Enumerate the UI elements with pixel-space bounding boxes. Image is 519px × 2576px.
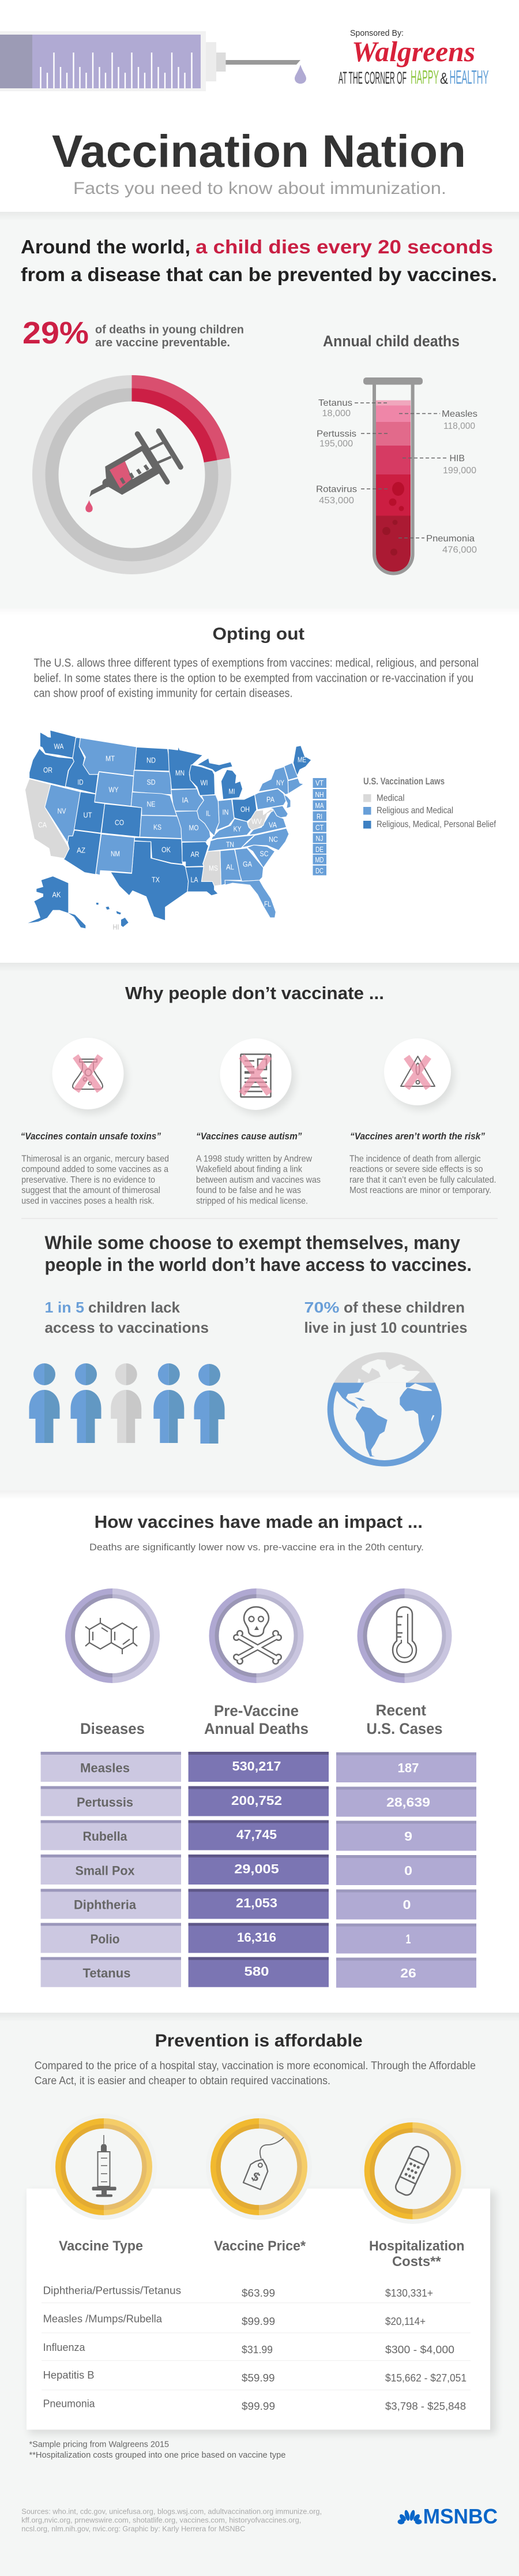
US map: TX — [152, 875, 160, 884]
table: price rows: $99.99 — [242, 2316, 275, 2327]
reason: not worth the risk: “Vaccines aren’t worth the risk” — [350, 1131, 485, 1142]
row: polio: Polio — [90, 1932, 120, 1946]
header syringe illustration — [0, 31, 306, 91]
map legend: Religious, Medical, Personal Belief — [377, 820, 496, 829]
reason: autism — [196, 1131, 321, 1206]
headline: child deaths — [21, 236, 497, 285]
stat: 1 in 5 — [45, 1299, 209, 1336]
row: pertussis: 200,752 — [231, 1793, 282, 1808]
test tube chart: 118,000 — [443, 421, 475, 431]
icon: study document — [220, 1038, 295, 1115]
US map: VA — [269, 820, 277, 829]
table headers: impact: Pre-Vaccine — [214, 1702, 299, 1719]
US map: CO — [115, 818, 124, 827]
reason: not worth the risk — [349, 1131, 496, 1195]
US map: MI — [228, 787, 235, 795]
headline: child deaths: Around the world, — [21, 236, 190, 257]
row: diphtheria — [41, 1889, 476, 1920]
icon: toxins flask — [52, 1038, 127, 1114]
heading: prevention is affordable: Prevention is affordable — [155, 2031, 363, 2051]
text block: prevention: Care Act, it is easier and cheaper to obtain required vaccinations. — [35, 2075, 330, 2087]
row: diphtheria: Diphtheria — [74, 1898, 137, 1912]
small state boxes: MA — [315, 801, 324, 810]
small state boxes: DE — [315, 845, 324, 854]
stat: 29 percent — [22, 316, 244, 350]
table: price rows: Diphtheria/Pertussis/Tetanus — [43, 2285, 181, 2296]
US map: PA — [266, 795, 274, 803]
US map: GA — [243, 859, 252, 868]
test tube chart: Pneumonia — [426, 534, 475, 544]
table headers: prices: Vaccine Price* — [214, 2238, 306, 2254]
small state boxes — [313, 778, 326, 875]
table headers: impact: Annual Deaths — [204, 1720, 309, 1737]
US map — [25, 730, 311, 931]
small state boxes: MD — [315, 855, 324, 864]
icon: five children — [29, 1363, 225, 1444]
US map: MO — [189, 823, 198, 832]
US map: ME — [298, 755, 306, 764]
row: measles — [41, 1752, 476, 1782]
table: price rows: Influenza — [43, 2342, 85, 2353]
reason: not worth the risk: The incidence of death from allergic — [349, 1154, 481, 1164]
reason: autism: stripped of his medical license. — [196, 1197, 308, 1206]
donut chart: 29 percent — [32, 375, 231, 574]
test tube chart: Measles — [442, 409, 477, 419]
test tube chart: Rotavirus — [316, 485, 357, 494]
row: tetanus — [41, 1957, 476, 1988]
heading: vaccine impact: How vaccines have made an impact ... — [95, 1512, 423, 1532]
US map: OH — [240, 805, 250, 813]
headline: child deaths: from a disease that can be prevented by vaccines. — [21, 264, 497, 285]
stat: 29 percent: 29% — [22, 316, 89, 350]
test tube chart: 453,000 — [319, 496, 354, 506]
US map: AR — [190, 850, 200, 858]
row: pertussis — [41, 1786, 476, 1817]
subheading: deaths lower: Deaths are significantly lower now vs. pre-vaccine era in the 20th century. — [89, 1542, 424, 1553]
US map: TN — [226, 840, 234, 848]
stat: 70 percent: of these children — [344, 1299, 465, 1316]
card: price table background — [27, 2189, 496, 2434]
sponsor logo: Sponsored By: — [350, 28, 404, 38]
US map: IA — [182, 795, 189, 804]
sources: ncsl.org, nlm.nih.gov, nvic.org: Graphic by: Karly Herrera for MSNBC — [21, 2524, 245, 2533]
reason: not worth the risk: reactions or severe side effects is so — [349, 1165, 483, 1174]
table headers: prices: Hospitalization — [369, 2238, 464, 2254]
row: measles: Measles — [80, 1761, 130, 1775]
row: small pox: 0 — [404, 1863, 412, 1878]
reason: unsafe toxins: suggest that the amount of thimerosal — [21, 1186, 160, 1195]
sponsor logo: AT THE CORNER OF — [339, 69, 407, 88]
stat: 70 percent: 70% — [304, 1299, 339, 1316]
US map: WV — [251, 817, 262, 825]
stat: 1 in 5: 1 in 5 — [45, 1299, 84, 1316]
table: price rows — [42, 2285, 471, 2412]
footnotes — [29, 2440, 285, 2460]
heading: access to vaccines: people in the world don’t have access to vaccines. — [45, 1254, 472, 1275]
icon ring: thermometer — [357, 1588, 452, 1683]
row: pertussis: 28,639 — [386, 1795, 430, 1809]
map legend: U.S. Vaccination Laws — [363, 776, 445, 787]
stat: 70 percent — [304, 1299, 467, 1336]
icon ring: molecule — [65, 1588, 160, 1683]
US map: MS — [209, 863, 218, 872]
row: pertussis: Pertussis — [77, 1795, 133, 1809]
table headers: impact: Diseases — [80, 1720, 145, 1737]
icon: warning triangle — [384, 1038, 454, 1110]
stat: 1 in 5: access to vaccinations — [45, 1319, 209, 1336]
table: price rows: $300 - $4,000 — [385, 2344, 454, 2356]
row: small pox: 29,005 — [234, 1862, 279, 1876]
test tube chart: 199,000 — [443, 466, 476, 476]
icon ring: price tag: $ — [249, 2169, 262, 2185]
table headers: prices: Costs** — [392, 2254, 441, 2270]
reason: autism: “Vaccines cause autism” — [196, 1131, 302, 1142]
table headers: impact — [80, 1702, 443, 1737]
small state boxes: NJ — [316, 834, 323, 843]
test tube chart — [316, 377, 477, 574]
reason: unsafe toxins: Thimerosal is an organic, mercury based — [21, 1154, 169, 1164]
stat: 29 percent: are vaccine preventable. — [95, 337, 230, 349]
US map: WY — [108, 785, 119, 794]
map legend: Religious and Medical — [377, 806, 453, 816]
US map: OK — [161, 845, 171, 854]
US map: WI — [201, 778, 208, 787]
logo: MSNBC: MSNBC — [423, 2504, 498, 2528]
US map: MN — [175, 768, 185, 777]
US map: NV — [58, 806, 66, 815]
heading: opting out: Opting out — [212, 625, 304, 644]
US map: AL — [226, 862, 234, 871]
row: diphtheria: 0 — [403, 1898, 411, 1912]
reason: unsafe toxins — [21, 1131, 169, 1206]
icon: syringe with drop — [85, 431, 180, 513]
small state boxes: VT — [315, 779, 324, 787]
table: price rows: $3,798 - $25,848 — [385, 2401, 466, 2412]
US map: FL — [264, 899, 271, 908]
test tube chart: 476,000 — [442, 545, 477, 555]
small state boxes: DC — [315, 866, 324, 875]
US map: SD — [146, 777, 156, 786]
test tube chart: Tetanus — [318, 398, 352, 408]
footnotes: *Sample pricing from Walgreens 2015 — [29, 2440, 169, 2450]
text block: exemptions: belief. In some states there is the option to be exempted from vaccination or re-vaccination if you — [33, 672, 473, 685]
table: price rows: $31.99 — [242, 2344, 273, 2356]
icon ring: price tag — [206, 2114, 312, 2220]
heading: why people don't vaccinate: Why people don’t vaccinate ... — [125, 983, 384, 1003]
row: rubella: 9 — [404, 1829, 412, 1844]
small state boxes: RI — [317, 812, 322, 821]
table: price rows: $130,331+ — [385, 2287, 433, 2299]
stat: 70 percent: live in just 10 countries — [304, 1319, 467, 1336]
sources: Sources: who.int, cdc.gov, unicefusa.org, blogs.wsj.com, adultvaccination.org immunize.org, — [21, 2507, 322, 2515]
table: price rows: $15,662 - $27,051 — [385, 2372, 467, 2384]
sponsor logo: Walgreens — [352, 35, 475, 68]
icon: globe — [328, 1352, 442, 1467]
test tube chart: 195,000 — [319, 439, 353, 449]
US map: MT — [106, 754, 115, 762]
sponsor logo: & — [440, 69, 448, 87]
text block: prevention — [35, 2060, 476, 2087]
US map: KY — [234, 824, 242, 833]
table: impact rows — [41, 1752, 476, 1988]
US map: UT — [83, 810, 92, 819]
row: polio: 16,316 — [237, 1930, 276, 1945]
sources: kff.org,nvic.org, prnewswire.com, shotatlife.org, vaccines.com, historyofvaccines.org, — [21, 2516, 301, 2525]
US map: CA — [38, 820, 47, 829]
icon ring: vaccine syringe — [51, 2114, 157, 2220]
table headers: prices — [59, 2238, 464, 2270]
heading: access to vaccines: While some choose to exempt themselves, many — [45, 1232, 460, 1253]
title: Vaccination Nation — [52, 125, 466, 177]
row: tetanus: 580 — [245, 1964, 269, 1979]
row: tetanus: 26 — [400, 1966, 416, 1980]
row: rubella: 47,745 — [236, 1827, 277, 1842]
icon ring: bandage — [360, 2118, 466, 2224]
US map: SC — [260, 849, 269, 858]
row: tetanus: Tetanus — [83, 1966, 130, 1980]
subtitle: Facts you need to know about immunization. — [73, 179, 446, 198]
reason: autism: between autism and vaccines was — [196, 1175, 321, 1185]
test tube chart: Pertussis — [317, 429, 356, 439]
US map: LA — [190, 875, 198, 884]
test tube chart: 18,000 — [322, 409, 351, 418]
reason: not worth the risk: rare that it can’t even be fully calculated. — [349, 1175, 496, 1185]
US map: OR — [43, 765, 52, 774]
sources — [21, 2507, 322, 2533]
row: rubella: Rubella — [83, 1829, 127, 1844]
US map: WA — [54, 742, 64, 750]
table: price rows: $63.99 — [242, 2287, 275, 2299]
footnotes: **Hospitalization costs grouped into one price based on vaccine type — [29, 2451, 285, 2460]
table: price rows: Hepatitis B — [43, 2369, 95, 2381]
US map: NY — [276, 778, 284, 787]
text block: exemptions — [33, 657, 479, 700]
headline: child deaths: a child dies every 20 seconds — [195, 236, 493, 257]
US map: ID — [77, 777, 83, 786]
table headers: impact: U.S. Cases — [367, 1720, 443, 1737]
US map: NM — [111, 849, 120, 858]
reason: unsafe toxins: compound added to some vaccines as a — [21, 1165, 168, 1174]
table: price rows: $99.99 — [242, 2401, 275, 2412]
US map: IL — [206, 809, 210, 817]
reason: autism: found to be false and he was — [196, 1186, 301, 1195]
US map: HI — [113, 922, 119, 931]
row: polio: 1 — [406, 1932, 411, 1946]
heading: annual child deaths: Annual child deaths — [323, 332, 460, 350]
heading: access to vaccines — [45, 1232, 472, 1275]
icon ring: skull and crossbones — [209, 1588, 303, 1683]
test tube chart: HIB — [450, 454, 465, 463]
table headers: prices: Vaccine Type — [59, 2238, 143, 2254]
row: measles: 187 — [398, 1761, 419, 1775]
reason: unsafe toxins: “Vaccines contain unsafe toxins” — [21, 1131, 161, 1142]
row: small pox: Small Pox — [75, 1863, 135, 1878]
sponsor logo: HAPPY — [411, 66, 439, 88]
US map: ND — [146, 756, 156, 764]
small state boxes: CT — [315, 823, 324, 832]
table: price rows: $59.99 — [242, 2372, 274, 2384]
table: price rows: Pneumonia — [43, 2398, 96, 2410]
table: price rows: $20,114+ — [385, 2316, 426, 2327]
US map: NE — [146, 799, 156, 808]
reason: unsafe toxins: used in vaccines poses a health risk. — [21, 1197, 154, 1206]
table headers: impact: Recent — [376, 1702, 426, 1719]
US map: NC — [269, 835, 278, 843]
row: rubella — [41, 1820, 476, 1850]
small state boxes: NH — [315, 790, 324, 799]
table: price rows: Measles /Mumps/Rubella — [43, 2313, 163, 2325]
map legend — [363, 776, 496, 829]
row: measles: 530,217 — [232, 1759, 281, 1774]
stat: 29 percent: of deaths in young children — [95, 323, 244, 336]
text block: exemptions: can show proof of existing immunity for certain diseases. — [33, 687, 293, 700]
reason: autism: A 1998 study written by Andrew — [196, 1154, 312, 1164]
US map: IN — [223, 807, 228, 816]
US map: AK — [52, 890, 61, 899]
US map: KS — [153, 822, 161, 831]
reason: autism: Wakefield about finding a link — [196, 1165, 303, 1174]
row: diphtheria: 21,053 — [236, 1895, 277, 1910]
US map: AZ — [77, 846, 85, 854]
reason: not worth the risk: Most reactions are minor or temporary. — [349, 1186, 491, 1195]
map legend: Medical — [377, 793, 405, 803]
reason: unsafe toxins: preservative. There is no evidence to — [21, 1175, 155, 1185]
sponsor logo — [339, 28, 489, 88]
text block: prevention: Compared to the price of a hospital stay, vaccination is more economical. Through the Affordable — [35, 2060, 476, 2072]
stat: 1 in 5: children lack — [88, 1299, 180, 1316]
row: polio — [41, 1923, 476, 1953]
row: small pox — [41, 1855, 476, 1885]
